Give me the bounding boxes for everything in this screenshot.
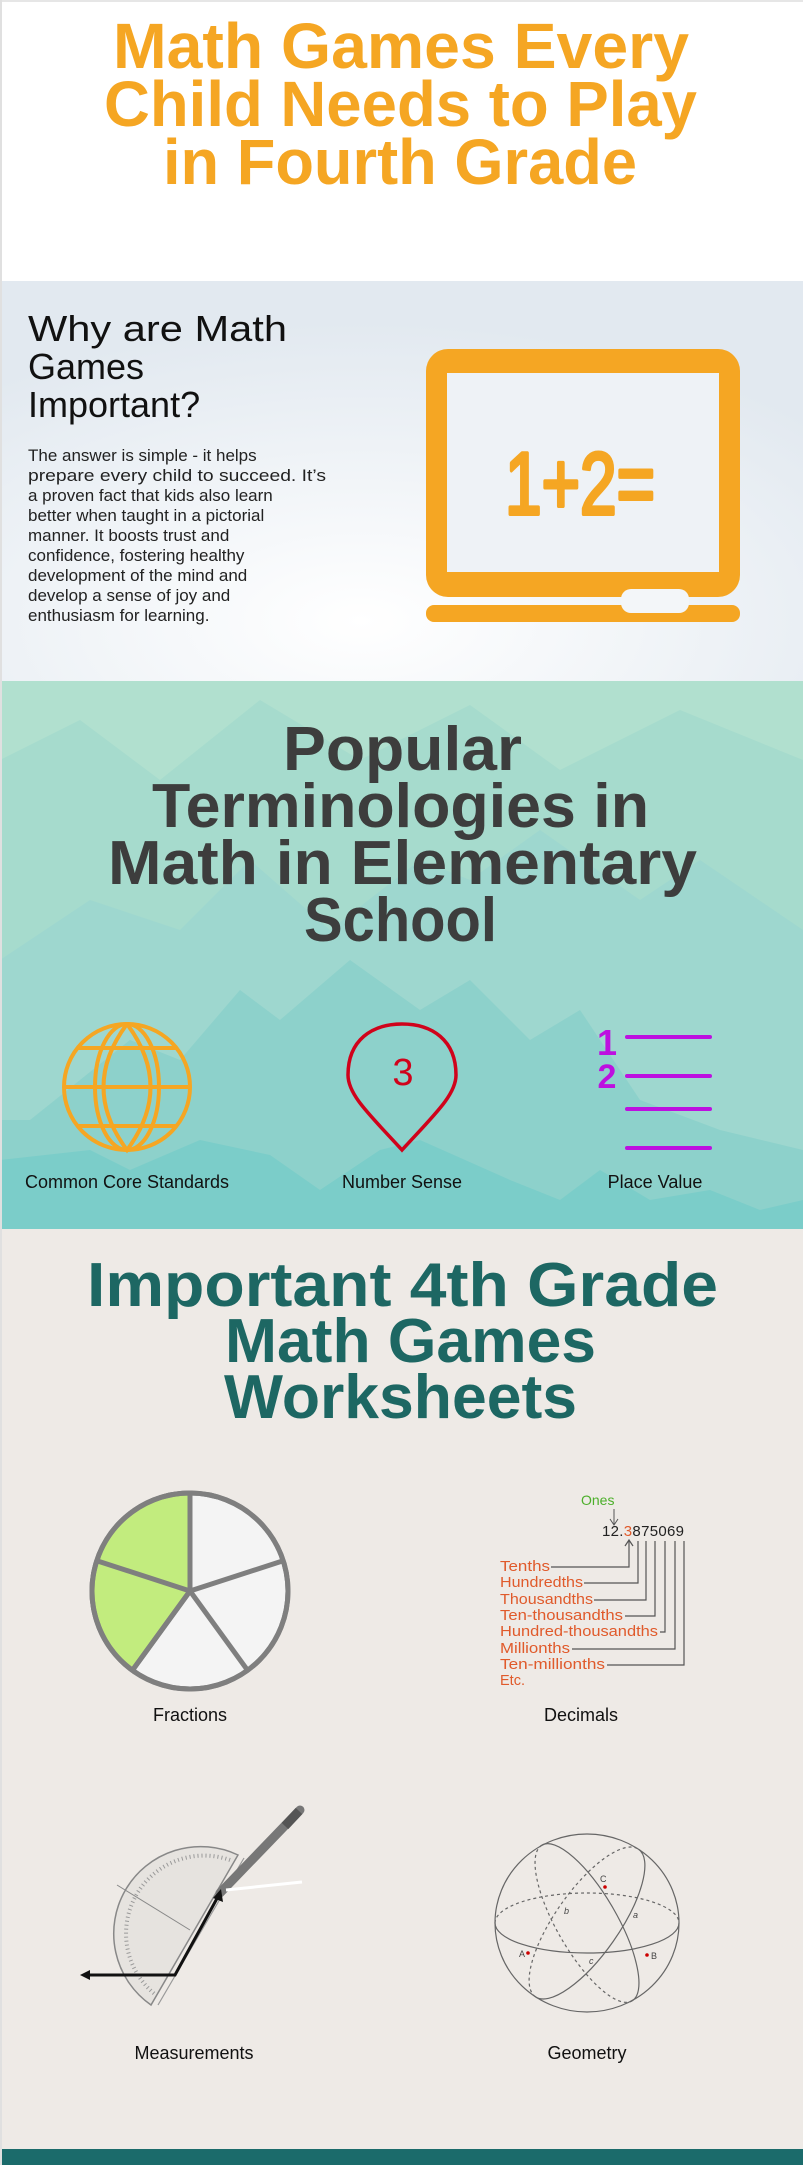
chart: decimals place diagram: Hundredths: [500, 1574, 583, 1591]
text block: answer: better when taught in a pictorial: [28, 506, 264, 525]
labels: worksheets: Fractions: [153, 1705, 227, 1725]
chart: decimals place diagram: Millionths: [500, 1640, 570, 1657]
chart: fractions pie: [92, 1493, 288, 1689]
text block: answer: The answer is simple - it helps: [28, 446, 257, 465]
text block: answer: enthusiasm for learning.: [28, 606, 209, 625]
icon: sphere geometry: B: [651, 1951, 657, 1961]
title: [104, 10, 697, 198]
title: Child Needs to Play: [104, 68, 697, 140]
icon: place value: [597, 1022, 710, 1148]
heading: why important: Why are Math: [28, 308, 287, 349]
text block: answer: a proven fact that kids also learn: [28, 486, 273, 505]
text block: answer: development of the mind and: [28, 566, 247, 585]
labels: worksheets: Decimals: [544, 1705, 618, 1725]
heading: worksheets: [87, 1251, 718, 1432]
heading: why important: Important?: [28, 384, 200, 425]
heading: why important: Games: [28, 346, 144, 387]
heading: popular terminologies: School: [304, 886, 497, 955]
icon: sphere geometry: b: [564, 1906, 569, 1916]
panel: why are math games important: [0, 281, 803, 681]
heading: worksheets: Math Games: [225, 1307, 596, 1376]
icon: place value: 1: [597, 1022, 617, 1063]
heading: popular terminologies: Popular: [283, 715, 522, 784]
chart: decimals place diagram: 12.3875069: [602, 1523, 684, 1540]
chart: decimals place diagram: Hundred-thousandths: [500, 1623, 658, 1640]
icon: chalkboard: [426, 349, 740, 622]
chart: decimals place diagram: Etc.: [500, 1672, 525, 1689]
chart: decimals place diagram: Ten-thousandths: [500, 1607, 623, 1624]
labels: terminologies: Common Core Standards: [25, 1172, 229, 1192]
icon: sphere geometry: [495, 1830, 679, 2016]
icon: number pin: [348, 1024, 456, 1150]
heading: popular terminologies: Math in Elementary: [108, 829, 698, 898]
labels: terminologies: Place Value: [608, 1172, 702, 1192]
icon: sphere geometry: C: [600, 1874, 607, 1884]
icon: sphere geometry: c: [589, 1956, 594, 1966]
heading: popular terminologies: Terminologies in: [152, 772, 649, 841]
labels: terminologies: Number Sense: [342, 1172, 462, 1192]
heading: worksheets: Worksheets: [224, 1363, 577, 1432]
text block: answer: manner. It boosts trust and: [28, 526, 229, 545]
icon: number pin: 3: [392, 1052, 414, 1094]
labels: worksheets: [134, 1705, 627, 2063]
labels: worksheets: Geometry: [547, 2043, 627, 2063]
heading: why important: [28, 308, 287, 425]
labels: terminologies: [25, 1172, 702, 1192]
icon: sphere geometry: A: [519, 1949, 525, 1959]
text block: answer: prepare every child to succeed. It’s: [28, 466, 326, 485]
labels: worksheets: Measurements: [134, 2043, 254, 2063]
text block: answer: develop a sense of joy and: [28, 586, 230, 605]
text block: answer: confidence, fostering healthy: [28, 546, 245, 565]
chart: decimals place diagram: [500, 1492, 684, 1689]
panel: title: [0, 0, 803, 281]
title: Math Games Every: [113, 10, 689, 82]
icon: chalkboard: 1+2=: [505, 434, 655, 533]
icon: protractor and pencil: [80, 1810, 302, 2005]
title: in Fourth Grade: [163, 126, 637, 198]
chart: decimals place diagram: Ones: [581, 1492, 614, 1508]
icon: globe: [64, 1024, 190, 1150]
chart: decimals place diagram: Tenths: [500, 1558, 550, 1575]
text block: answer: [28, 446, 326, 625]
panel: popular terminologies: [0, 681, 803, 1229]
chart: decimals place diagram: Thousandths: [500, 1591, 593, 1608]
footer bar: [0, 2149, 803, 2165]
icon: sphere geometry: a: [633, 1910, 638, 1920]
heading: popular terminologies: [108, 715, 698, 955]
heading: worksheets: Important 4th Grade: [87, 1251, 718, 1320]
chart: decimals place diagram: Ten-millionths: [500, 1656, 605, 1673]
panel: worksheets: [0, 1229, 803, 2150]
icon: place value: 2: [598, 1058, 616, 1096]
